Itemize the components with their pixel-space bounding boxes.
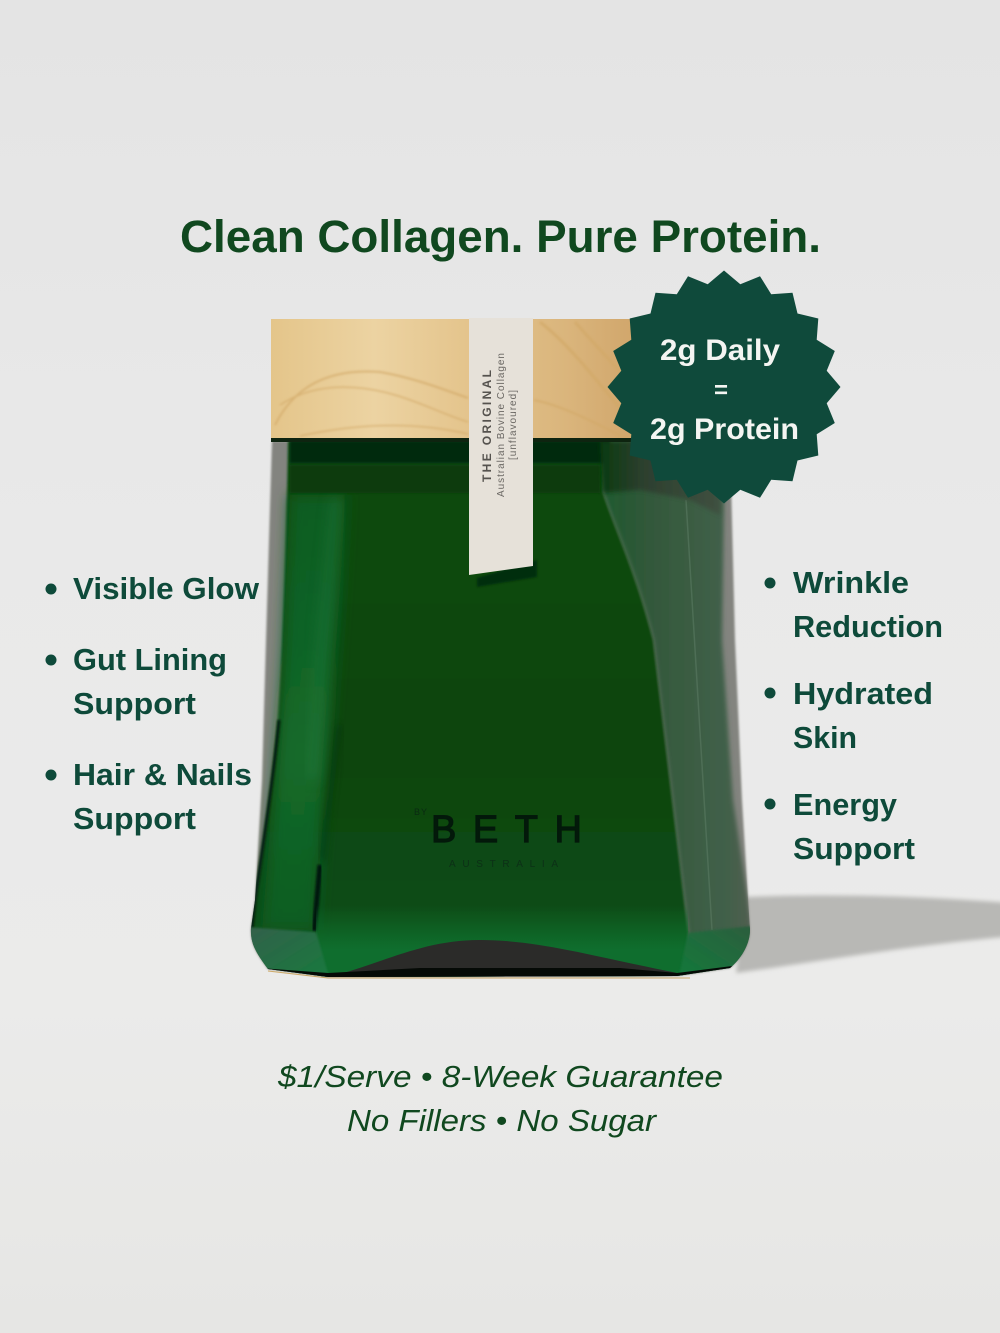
base line <box>268 971 690 978</box>
neck band <box>290 441 610 463</box>
benefit: Hair & Nails Support: Support <box>73 801 196 836</box>
benefit: Wrinkle Reduction: Wrinkle <box>793 565 909 600</box>
brand logo: BETH <box>431 809 582 851</box>
green core <box>251 441 688 990</box>
label text: THE ORIGINAL <box>480 370 494 482</box>
starburst badge: = <box>714 377 728 404</box>
benefit: Gut Lining Support: Support <box>73 686 196 721</box>
label shadow <box>477 560 537 587</box>
brand logo <box>414 807 582 870</box>
bottom glow <box>316 910 688 949</box>
benefit: Gut Lining Support: Gut Lining <box>73 642 227 677</box>
product jar <box>245 318 760 990</box>
paper label: Australian Bovine Collagen <box>496 353 507 497</box>
dark stripe <box>322 725 340 860</box>
benefit: Hair & Nails Support <box>46 757 252 836</box>
dark edge <box>252 720 279 928</box>
benefit: Hydrated Skin <box>764 676 933 755</box>
wooden lid <box>271 319 640 442</box>
paper label: [unflavoured] <box>508 390 519 460</box>
benefit: Wrinkle Reduction <box>764 565 943 644</box>
jar body <box>245 441 760 990</box>
brand logo: AUSTRALIA <box>449 859 558 870</box>
bottom tagline: $1/Serve • 8-Week Guarantee <box>277 1059 723 1094</box>
right bevel <box>602 442 750 974</box>
paper label <box>469 318 533 575</box>
benefit: Gut Lining Support <box>46 642 227 721</box>
jar shadow <box>736 896 1000 973</box>
starburst badge: 2g Protein <box>650 413 799 446</box>
title: Clean Collagen. Pure Protein. <box>180 211 821 262</box>
right benefits list <box>764 565 943 866</box>
bottom facets <box>250 926 328 977</box>
benefit: Energy Support: Energy <box>793 787 898 822</box>
benefit: Hydrated Skin: Skin <box>793 720 857 755</box>
left benefits list <box>46 571 260 836</box>
glass silhouette <box>251 441 750 977</box>
benefit: Hydrated Skin: Hydrated <box>793 676 933 711</box>
starburst badge <box>608 270 840 504</box>
benefit: Wrinkle Reduction: Reduction <box>793 609 943 644</box>
brand logo: BY <box>414 807 428 817</box>
benefit: Visible Glow: Visible Glow <box>73 571 260 606</box>
benefit: Energy Support: Support <box>793 831 915 866</box>
benefit: Energy Support <box>764 787 915 866</box>
bottom tagline: No Fillers • No Sugar <box>347 1103 658 1138</box>
badge text: 2g Daily <box>660 334 780 367</box>
benefit: Hair & Nails Support: Hair & Nails <box>73 757 252 792</box>
left bevel <box>262 495 345 930</box>
bottom tagline <box>277 1059 723 1138</box>
